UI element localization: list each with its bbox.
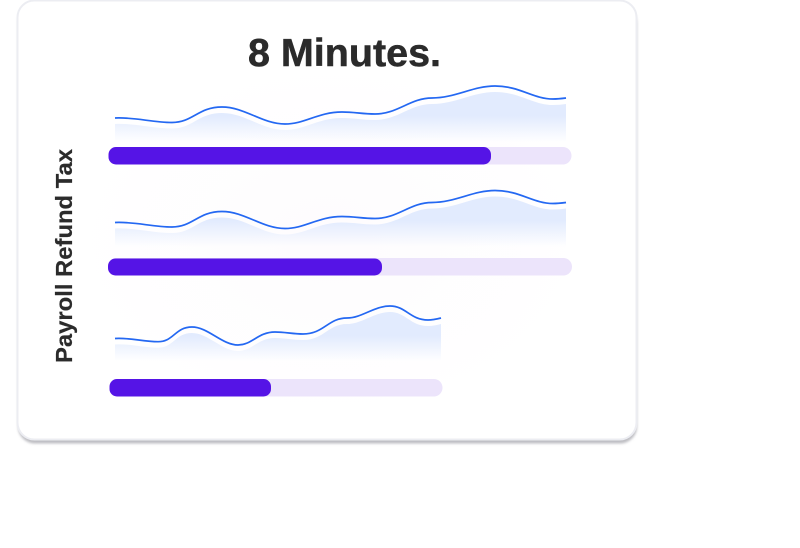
chart: sparkline 2 — [115, 190, 566, 250]
bar 2 — [108, 258, 572, 276]
chart: sparkline 3 — [115, 306, 441, 364]
bar 1 — [108, 147, 572, 164]
bar 3 — [110, 379, 442, 396]
axis label: Payroll Refund Tax — [51, 149, 77, 363]
title: 8 Minutes. — [248, 32, 441, 75]
panel: card — [18, 0, 637, 444]
chart: sparkline 1 — [115, 86, 566, 146]
